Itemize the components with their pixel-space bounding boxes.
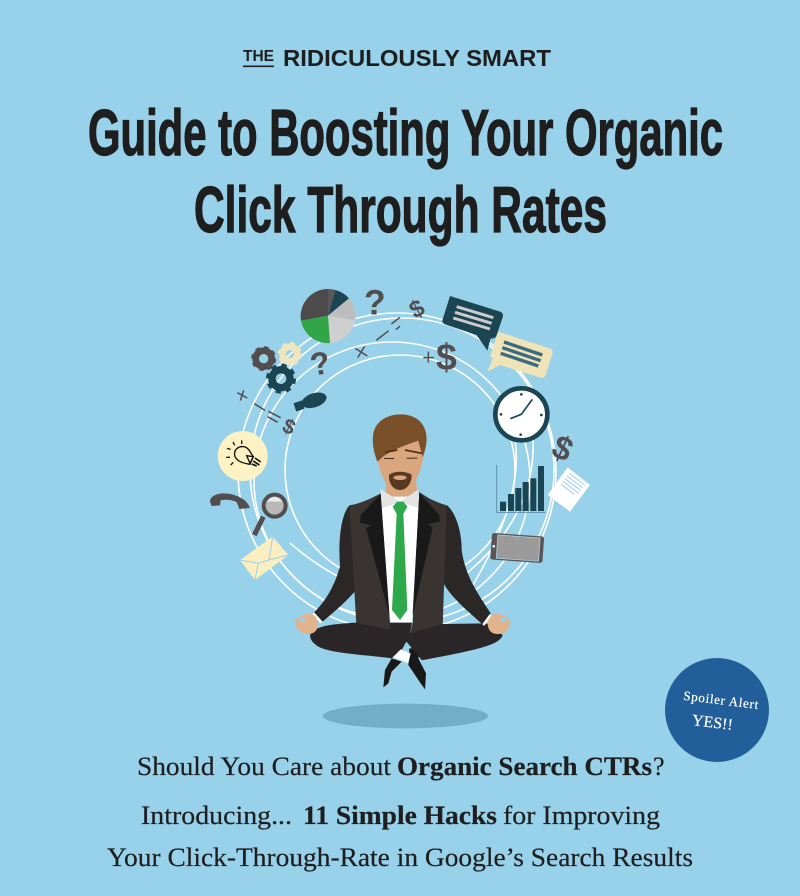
icon: dollar small: $ xyxy=(279,414,299,440)
icon: smartphone xyxy=(490,533,544,563)
subheading: introducing hacks: 11 Simple Hacks xyxy=(303,801,497,830)
lower right icons xyxy=(490,428,590,563)
crossed legs xyxy=(310,623,503,660)
icon: cream speech bubble xyxy=(487,332,553,378)
icon: gear cream xyxy=(279,343,301,365)
eyebrow heading: THE xyxy=(243,48,274,65)
icon: question mark large: ? xyxy=(364,283,386,322)
icon: math symbols top xyxy=(355,317,400,358)
icon: telephone handset xyxy=(210,493,250,509)
icon: light bulb xyxy=(218,431,268,481)
icon: usb stick xyxy=(294,390,329,411)
shirt and collar xyxy=(381,489,419,623)
subheading: should you care: ? xyxy=(653,752,665,781)
subheading: should you care xyxy=(137,752,665,781)
subheading: should you care: Organic Search CTRs xyxy=(397,752,652,781)
floating shadow xyxy=(323,704,488,728)
icon: gear teal xyxy=(268,365,294,392)
jacket arms xyxy=(313,505,491,625)
subheading: click-through-rate: Your Click-Through-Rate in Google’s Search Results xyxy=(107,843,693,872)
icon: math symbols left xyxy=(237,390,281,422)
icon: dollar top: $ xyxy=(405,294,429,324)
icon: dark speech bubble xyxy=(442,296,503,351)
jacket body xyxy=(349,492,447,635)
subheading: introducing hacks: Introducing... xyxy=(141,801,292,830)
icon: document xyxy=(548,467,590,512)
meditating man xyxy=(295,414,511,728)
icon: plus xyxy=(423,352,434,363)
subheading: introducing hacks xyxy=(141,801,660,830)
left and top icons xyxy=(218,283,400,481)
subheading: should you care: Should You Care about xyxy=(137,752,392,781)
icon: gear dark grey xyxy=(253,348,275,370)
icon: question mark small: ? xyxy=(307,344,333,383)
eyebrow heading: RIDICULOUSLY SMART xyxy=(283,45,551,71)
title xyxy=(88,96,723,246)
icon: magnifying glass xyxy=(254,495,286,535)
icon: pie chart xyxy=(301,289,355,343)
icon: envelope xyxy=(240,537,288,580)
icon: clock xyxy=(495,388,547,440)
orbit rings xyxy=(238,313,556,631)
subheading: introducing hacks: for Improving xyxy=(503,801,660,830)
icon: dollar right: $ xyxy=(546,428,579,470)
right icons xyxy=(405,294,553,440)
shoes and sock xyxy=(383,648,426,689)
spoiler alert badge: YES!! xyxy=(691,712,734,734)
green tie xyxy=(392,502,407,620)
spoiler alert badge: Spoiler Alert xyxy=(683,688,760,712)
neck xyxy=(385,480,418,500)
lapels xyxy=(360,493,440,615)
spoiler alert badge xyxy=(665,658,769,762)
icon: bar chart xyxy=(497,465,545,512)
head xyxy=(373,414,427,494)
icon: dollar large: $ xyxy=(436,335,457,377)
hands xyxy=(295,613,511,634)
lower left icons xyxy=(210,493,288,580)
